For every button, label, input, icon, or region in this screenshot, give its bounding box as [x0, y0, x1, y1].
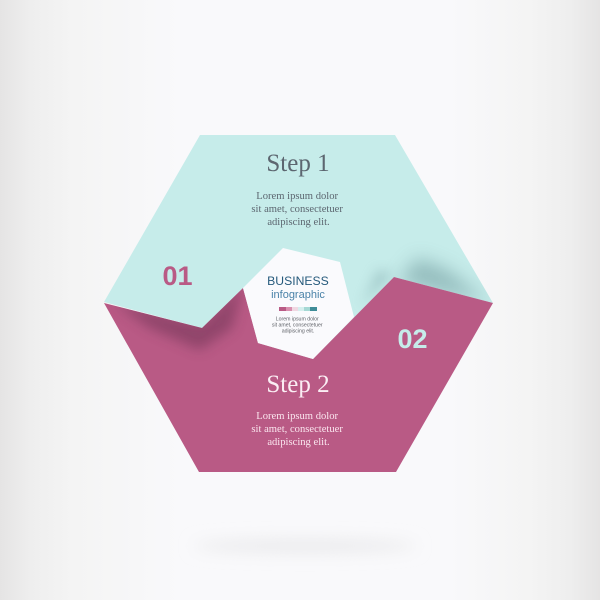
- panel: step 1 teal segment: [104, 135, 493, 359]
- center text: Lorem ipsum dolor: [276, 316, 319, 322]
- number: 02: 02: [397, 324, 428, 354]
- center text: sit amet, consectetuer: [272, 322, 323, 328]
- text: step 2 body: sit amet, consectetuer: [251, 424, 343, 435]
- color bar: [279, 307, 317, 311]
- text: step 2 body: adipiscing elit.: [267, 437, 330, 448]
- heading: infographic: infographic: [271, 289, 325, 301]
- text: step 1 body: Lorem ipsum dolor: [256, 191, 339, 202]
- panel: step 2 pink segment: [104, 277, 493, 472]
- heading: business: BUSINESS: [267, 274, 329, 288]
- heading: step 1: Step 1: [266, 150, 330, 177]
- panel: center hexagon: [243, 248, 354, 359]
- heading: step 2: Step 2: [266, 371, 330, 398]
- text: step 2 body: Lorem ipsum dolor: [256, 411, 339, 422]
- text: step 1 body: sit amet, consectetuer: [251, 204, 343, 215]
- number: 01: 01: [162, 261, 193, 291]
- center text: adipiscing elit.: [282, 328, 314, 334]
- text: step 1 body: adipiscing elit.: [267, 217, 330, 228]
- floor shadow: [193, 540, 417, 552]
